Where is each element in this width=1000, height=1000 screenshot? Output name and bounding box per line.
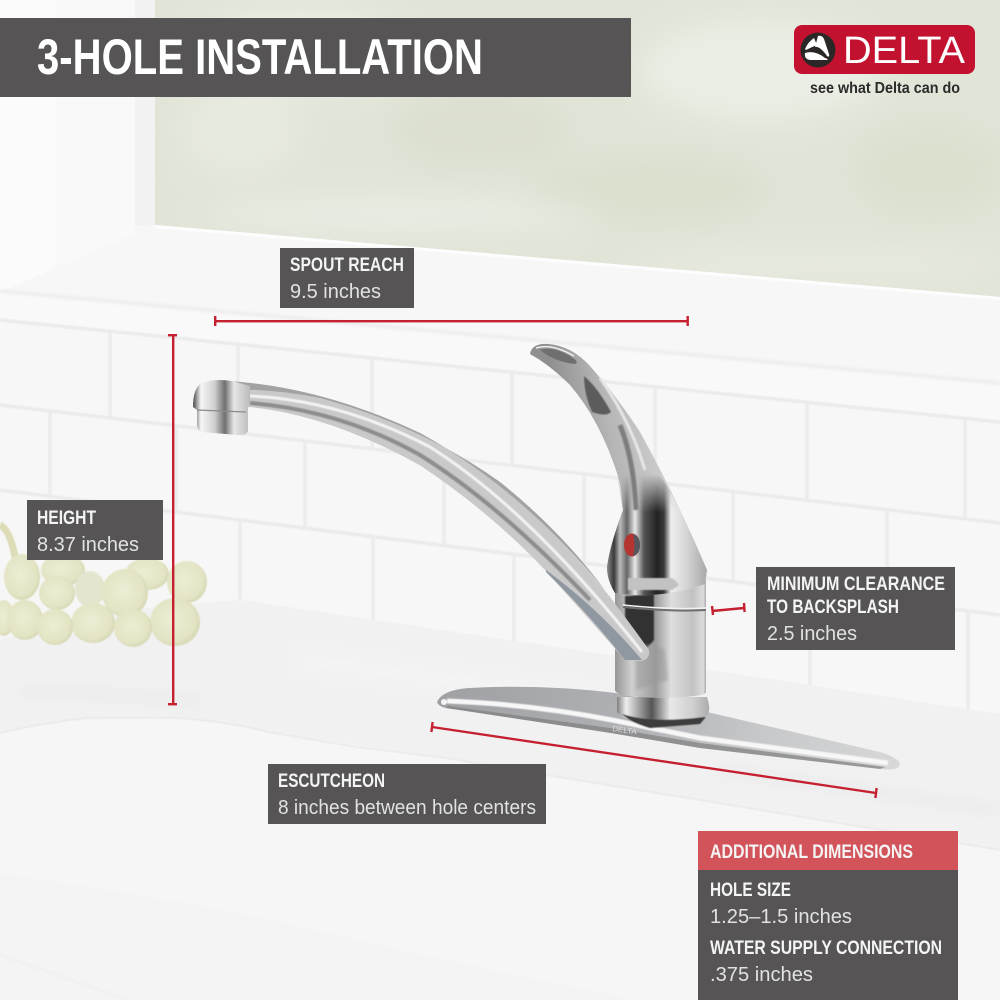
- base collar: [617, 697, 709, 728]
- sink basin: [0, 718, 1000, 1000]
- panel: additional dimensions: .375 inches: [710, 964, 813, 986]
- callout: spout reach: 9.5 inches: [290, 281, 381, 303]
- wall molding: [0, 292, 1000, 423]
- faucet: [193, 344, 900, 770]
- icon: grapes: [0, 525, 207, 647]
- logo: Delta: see what Delta can do: [810, 80, 960, 97]
- escutcheon plate: DELTA: [612, 724, 638, 736]
- body column: [615, 580, 706, 698]
- dimension line: spout reach: [214, 316, 689, 326]
- callout: escutcheon: [268, 764, 546, 824]
- panel: additional dimensions: [698, 831, 958, 1000]
- callout: spout reach: SPOUT REACH: [290, 255, 404, 276]
- dimension line: escutcheon: [431, 722, 877, 798]
- handle: [530, 344, 707, 595]
- panel heading: ADDITIONAL DIMENSIONS: [710, 842, 913, 863]
- panel heading: [698, 831, 958, 870]
- callout: minimum clearance: MINIMUM CLEARANCE: [767, 574, 945, 595]
- callout: height: HEIGHT: [37, 508, 96, 529]
- icon: hot cold indicator: [624, 534, 640, 556]
- callout: minimum clearance: TO BACKSPLASH: [767, 597, 899, 618]
- callout: escutcheon: ESCUTCHEON: [278, 771, 385, 792]
- panel: additional dimensions: WATER SUPPLY CONNECTION: [710, 938, 942, 959]
- dimension line: clearance: [712, 603, 745, 615]
- aerator: [193, 380, 250, 435]
- tile wall: [0, 320, 1000, 720]
- callout: minimum clearance: [756, 567, 955, 650]
- window sill: [0, 225, 1000, 385]
- logo: Delta: [794, 25, 975, 97]
- icon: Delta triangle mark: [800, 32, 836, 68]
- callout: escutcheon: 8 inches between hole centers: [278, 797, 536, 819]
- dimension line: height: [168, 334, 177, 705]
- callout: height: 8.37 inches: [37, 534, 139, 556]
- marble counter: [0, 600, 1000, 850]
- panel: additional dimensions: 1.25–1.5 inches: [710, 906, 852, 928]
- spout: [193, 380, 649, 661]
- window frame: [0, 0, 155, 295]
- title banner: 3-HOLE INSTALLATION: [37, 29, 483, 85]
- callout: spout reach: [280, 248, 414, 308]
- logo: Delta: DELTA: [843, 30, 966, 72]
- escutcheon plate: [437, 687, 900, 770]
- window view with blurred foliage: [155, 0, 1000, 300]
- callout: minimum clearance: 2.5 inches: [767, 623, 857, 645]
- title banner: [0, 18, 631, 97]
- panel: additional dimensions: HOLE SIZE: [710, 880, 791, 901]
- callout: height: [27, 500, 163, 560]
